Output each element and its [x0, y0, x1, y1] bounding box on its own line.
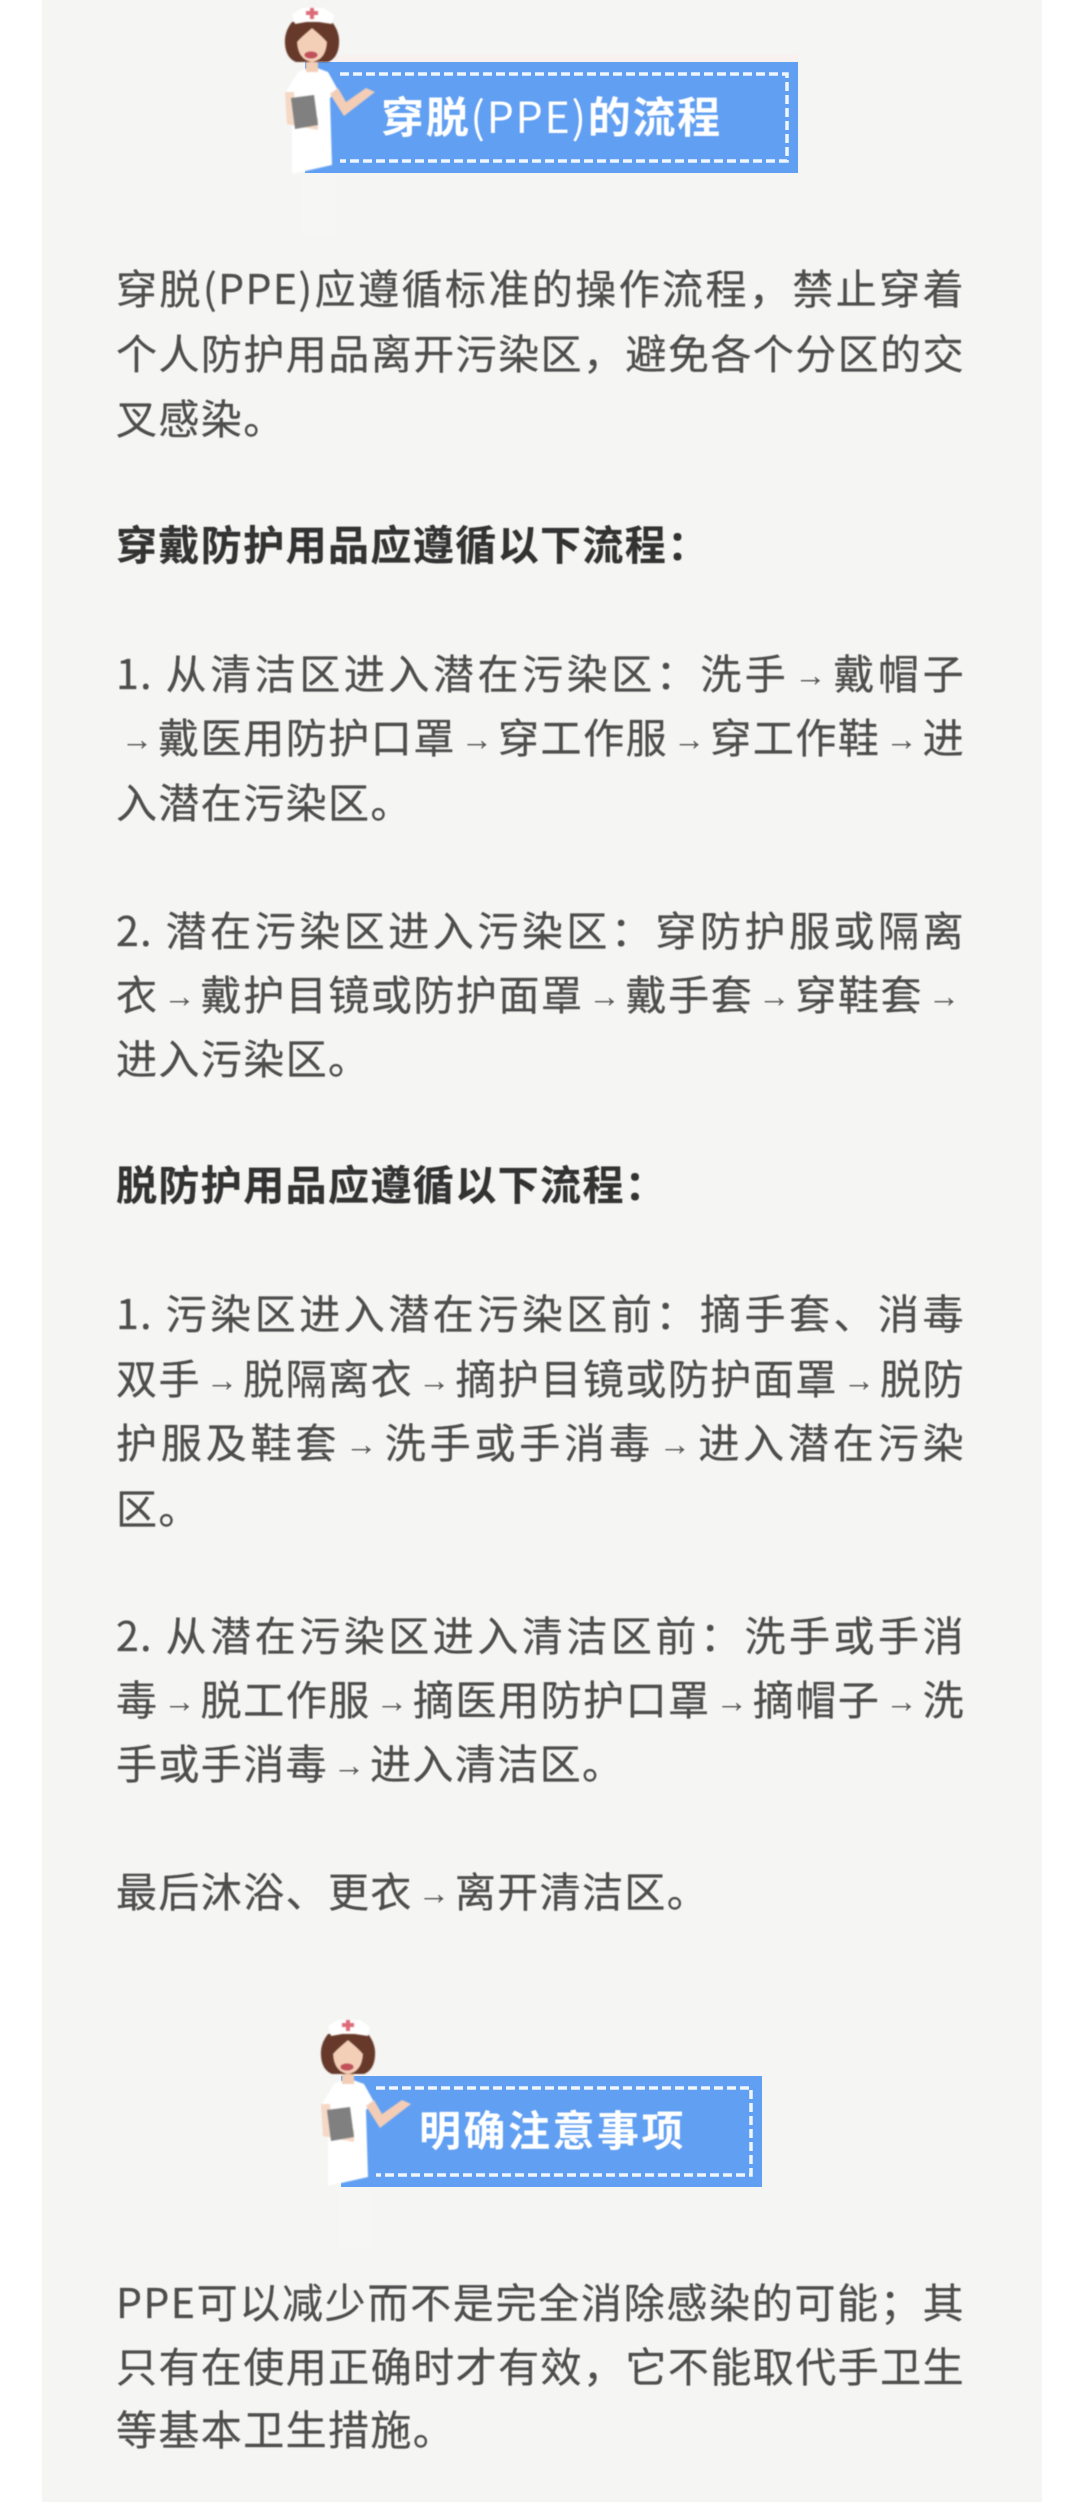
text block: precautions: 等基本卫生措施。 [116, 2397, 455, 2457]
text block: donning step 1: → [461, 721, 493, 757]
text block: intro: 叉感染。 [116, 386, 286, 446]
text block: doffing step 1: → [206, 1362, 238, 1398]
text block: intro [116, 256, 965, 446]
text block: doffing step 1: 双手 脱隔离衣 摘护目镜或防护面罩 脱防 [116, 1346, 965, 1406]
text block: doffing step 2: → [716, 1683, 748, 1719]
text block: precautions: 只有在使用正确时才有效，它不能取代手卫生 [116, 2334, 965, 2394]
text block: intro: 个人防护用品离开污染区，避免各个分区的交 [116, 321, 965, 381]
text block: final step: 最后沐浴、更衣 离开清洁区。 [116, 1859, 709, 1919]
text block: doffing step 2 [116, 1603, 965, 1791]
text block: doffing step 1: → [345, 1426, 377, 1462]
text block: donning step 2 [116, 898, 965, 1086]
text block: doffing step 1: → [843, 1362, 875, 1398]
text block: donning step 2: → [589, 978, 621, 1014]
text block: donning step 2: → [164, 978, 196, 1014]
text block: doffing step 1: 护服及鞋套 洗手或手消毒 进入潜在污染 [116, 1410, 965, 1470]
text block: donning step 2: → [758, 978, 790, 1014]
text block: doffing step 1 [116, 1281, 965, 1536]
text block: donning step 1: → [121, 721, 153, 757]
text block: doffing step 2: → [885, 1683, 917, 1719]
text block: donning step 1: 1. 从清洁区进入潜在污染区：洗手 戴帽子 [116, 641, 965, 701]
text block: donning step 1 [116, 641, 965, 830]
text block: precautions [116, 2270, 965, 2457]
text block: donning step 1: → [885, 721, 917, 757]
text block: doffing step 1: 区。 [116, 1476, 201, 1536]
text block: doffing step 1: → [418, 1362, 450, 1398]
heading: donning flow: 穿戴防护用品应遵循以下流程： [116, 512, 710, 572]
text block: doffing step 2: 手或手消毒 进入清洁区。 [116, 1731, 624, 1791]
heading: doffing flow: 脱防护用品应遵循以下流程： [116, 1152, 667, 1212]
text block: donning step 2: 进入污染区。 [116, 1026, 370, 1086]
text block: doffing step 2: 毒 脱工作服 摘医用防护口罩 摘帽子 洗 [116, 1667, 965, 1727]
text block: donning step 1: → [673, 721, 705, 757]
text block: final step: → [418, 1875, 450, 1911]
heading banner: PPE process [284, 7, 798, 173]
text block: donning step 2: 2. 潜在污染区进入污染区：穿防护服或隔离 [116, 898, 965, 958]
text block: donning step 1: 戴医用防护口罩 穿工作服 穿工作鞋 进 [158, 705, 965, 765]
text block: doffing step 2: → [333, 1747, 365, 1783]
text block: doffing step 1: 1. 污染区进入潜在污染区前：摘手套、消毒 [116, 1281, 965, 1341]
heading: precautions title: 明确注意事项 [419, 2098, 686, 2159]
text block: doffing step 2: → [164, 1683, 196, 1719]
text block: donning step 1: → [794, 657, 826, 693]
text block: doffing step 2: 2. 从潜在污染区进入清洁区前：洗手或手消 [116, 1603, 965, 1663]
heading banner: precautions [320, 2019, 762, 2187]
text block: donning step 2: 衣 戴护目镜或防护面罩 戴手套 穿鞋套 [116, 962, 923, 1022]
text block: doffing step 1: → [659, 1426, 691, 1462]
text block: donning step 2: → [928, 978, 960, 1014]
text block: intro: 穿脱(PPE)应遵循标准的操作流程，禁止穿着 [116, 256, 965, 316]
text block: precautions: PPE可以减少而不是完全消除感染的可能；其 [116, 2270, 965, 2330]
heading: PPE process title: 穿脱(PPE)的流程 [381, 84, 722, 146]
icon: nurse [285, 8, 375, 174]
icon: nurse [321, 2020, 411, 2186]
text block: doffing step 2: → [376, 1683, 408, 1719]
text block: donning step 1: 入潜在污染区。 [116, 770, 413, 830]
